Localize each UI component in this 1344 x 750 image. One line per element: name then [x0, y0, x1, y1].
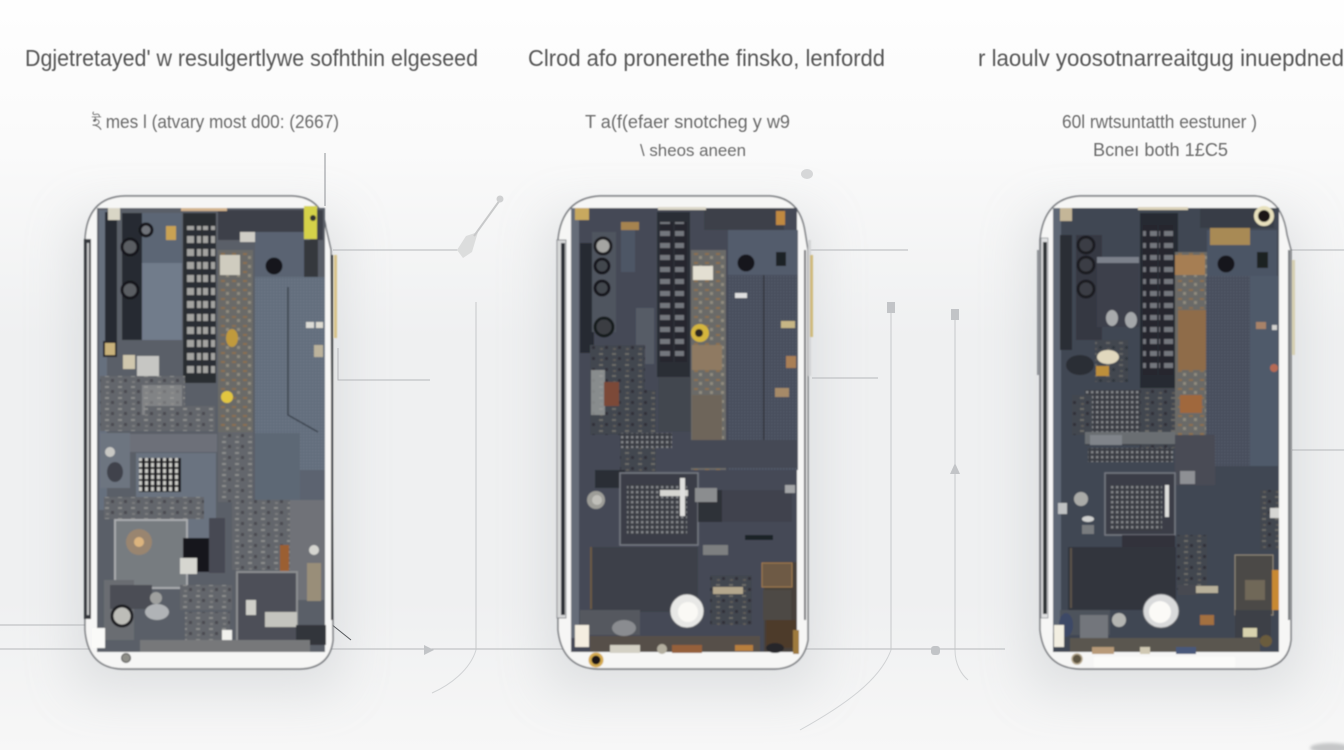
phone two: [557, 196, 813, 669]
subheading: column two: T a(f(efaer snotcheg y w9: [585, 112, 790, 132]
phone two side buttons: [557, 240, 813, 620]
subheading: column two: \ sheos aneen: [640, 141, 746, 160]
phone three bottom screw: [1072, 654, 1082, 664]
heading: column two: Clrod afo pronerethe finsko, lenfordd: [528, 45, 885, 71]
phone three bottom strip: [1094, 657, 1235, 668]
heading: column one: Dgjetretayed' w resulgertlywe sofhthin elgeseed: [25, 45, 478, 71]
phone three side buttons: [1037, 238, 1295, 620]
soft phone shadows: [75, 215, 1298, 690]
subheading: column one: ই mes l (atvary most d00: (2667): [91, 112, 339, 132]
subheading: column three: [1062, 112, 1257, 160]
phone two circuit board: [571, 207, 799, 654]
subheading: column two: [585, 112, 790, 160]
phone one: [84, 196, 337, 669]
arrow markers: [424, 302, 960, 655]
annotation lines: [0, 153, 1344, 730]
subheading: column three: 60l rwtsuntatth eestuner ): [1062, 112, 1257, 132]
phone three body: [1040, 196, 1291, 669]
icon: small oval mark: [801, 169, 813, 179]
subheading: column three: Bcneı both 1£C5: [1093, 140, 1228, 160]
phone three home button: [1143, 594, 1179, 628]
phone one body: [85, 196, 333, 669]
phone one circuit board: [92, 206, 326, 652]
phone two body: [558, 196, 808, 669]
phone two home button: [670, 594, 704, 628]
corner smudge: [1310, 743, 1344, 750]
phone three: [1037, 196, 1295, 669]
phone two bottom screw: [590, 654, 602, 666]
phone one bottom screw: [122, 654, 130, 662]
icon: pencil mark: [457, 196, 504, 258]
phone one side buttons: [84, 239, 337, 620]
phone three circuit board: [1053, 207, 1279, 654]
